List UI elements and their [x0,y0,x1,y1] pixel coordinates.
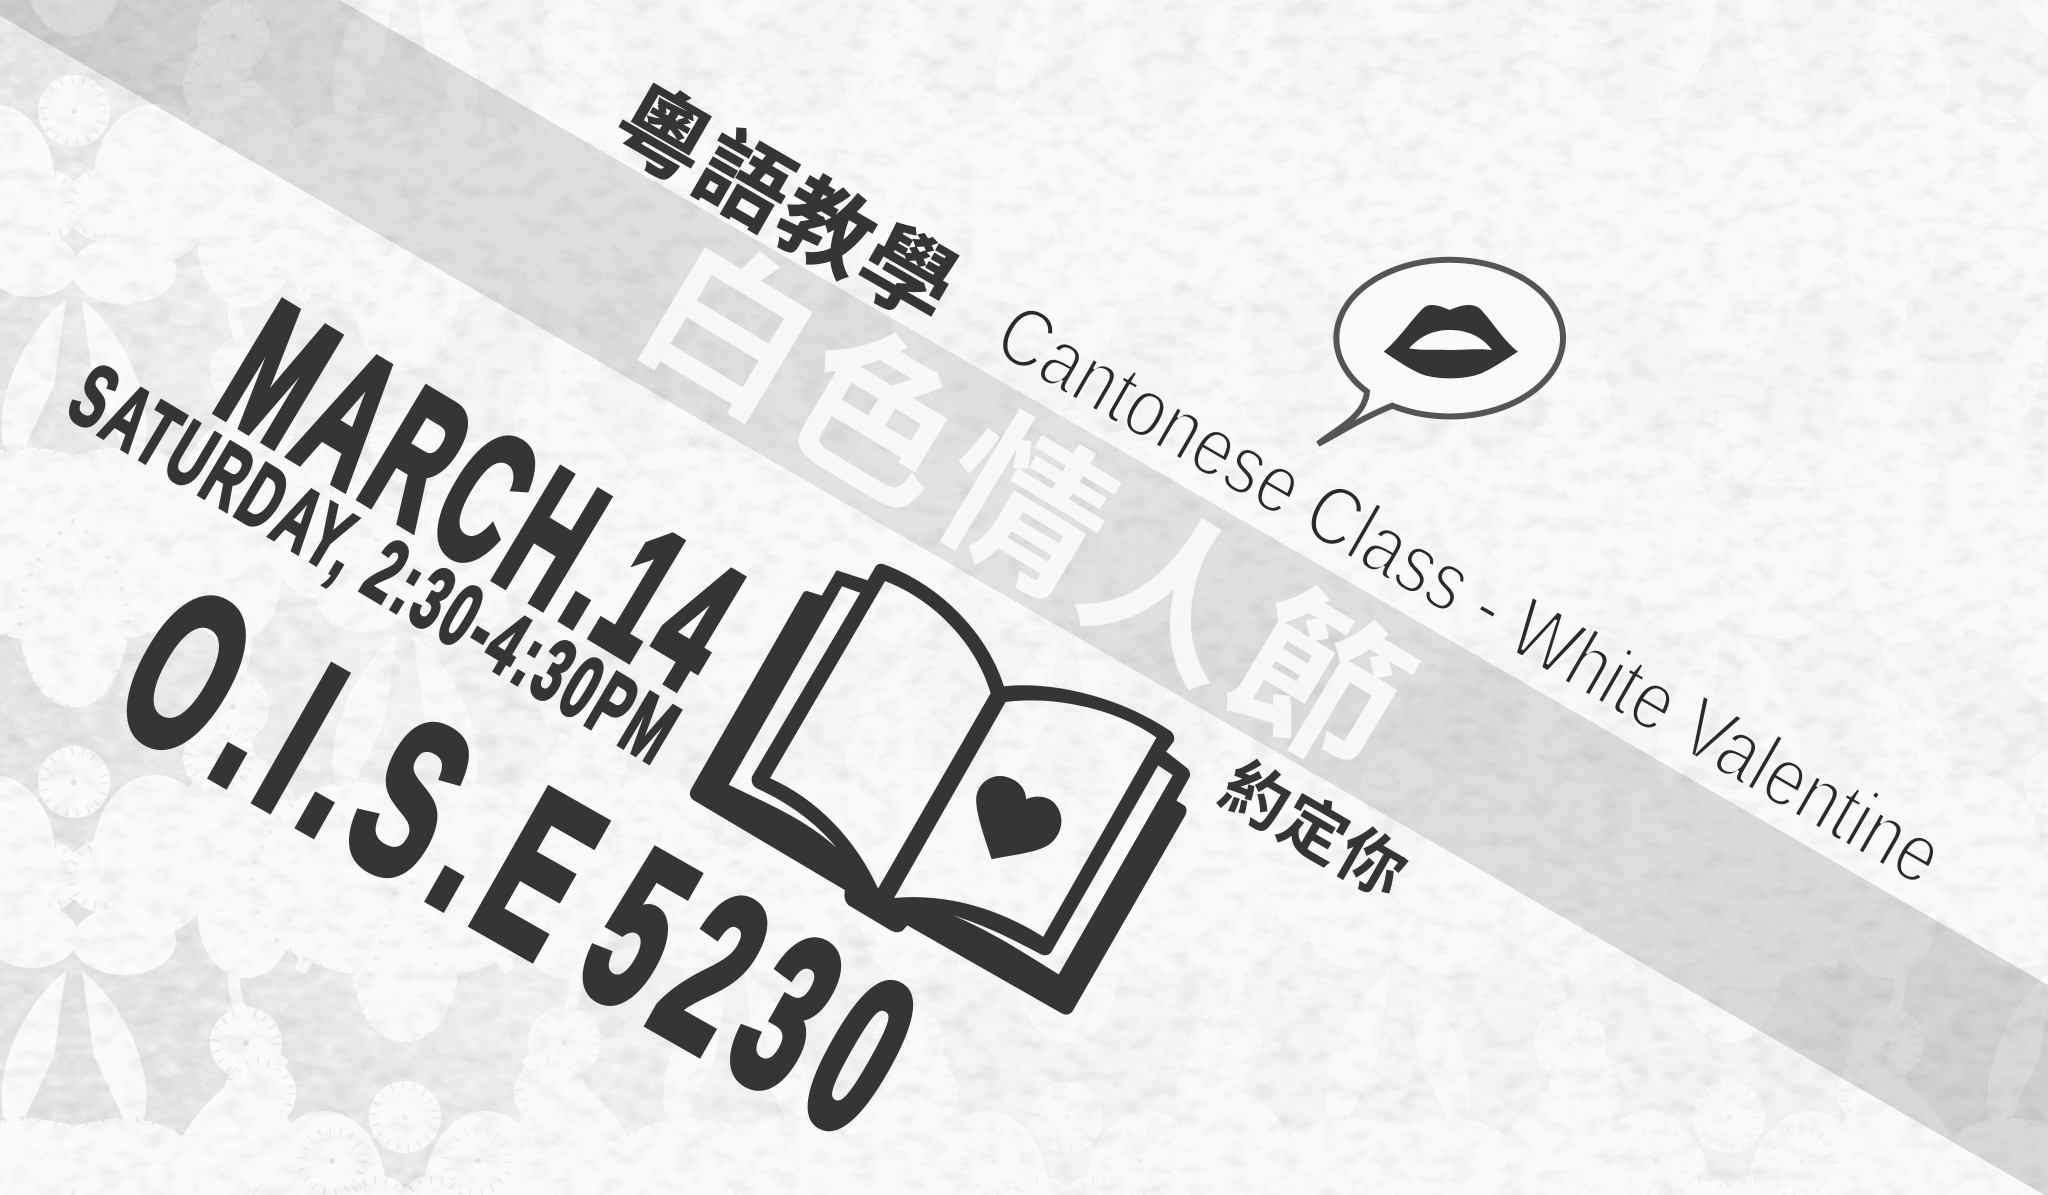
tagline: 約定你: 約定你 [1208,748,1420,912]
time: SATURDAY, 2:30-4:30PM: SATURDAY, 2:30-4:30PM [53,345,697,784]
icon: heart [976,776,1061,859]
icon: open book with heart [690,564,1190,1014]
date: MARCH.14: MARCH.14 [189,265,778,732]
heading: 粵語教學: 粵語教學 [597,68,973,344]
heading: 白色情人節: 白色情人節 [609,209,1441,811]
icon: speech bubble with lips [1318,260,1563,444]
